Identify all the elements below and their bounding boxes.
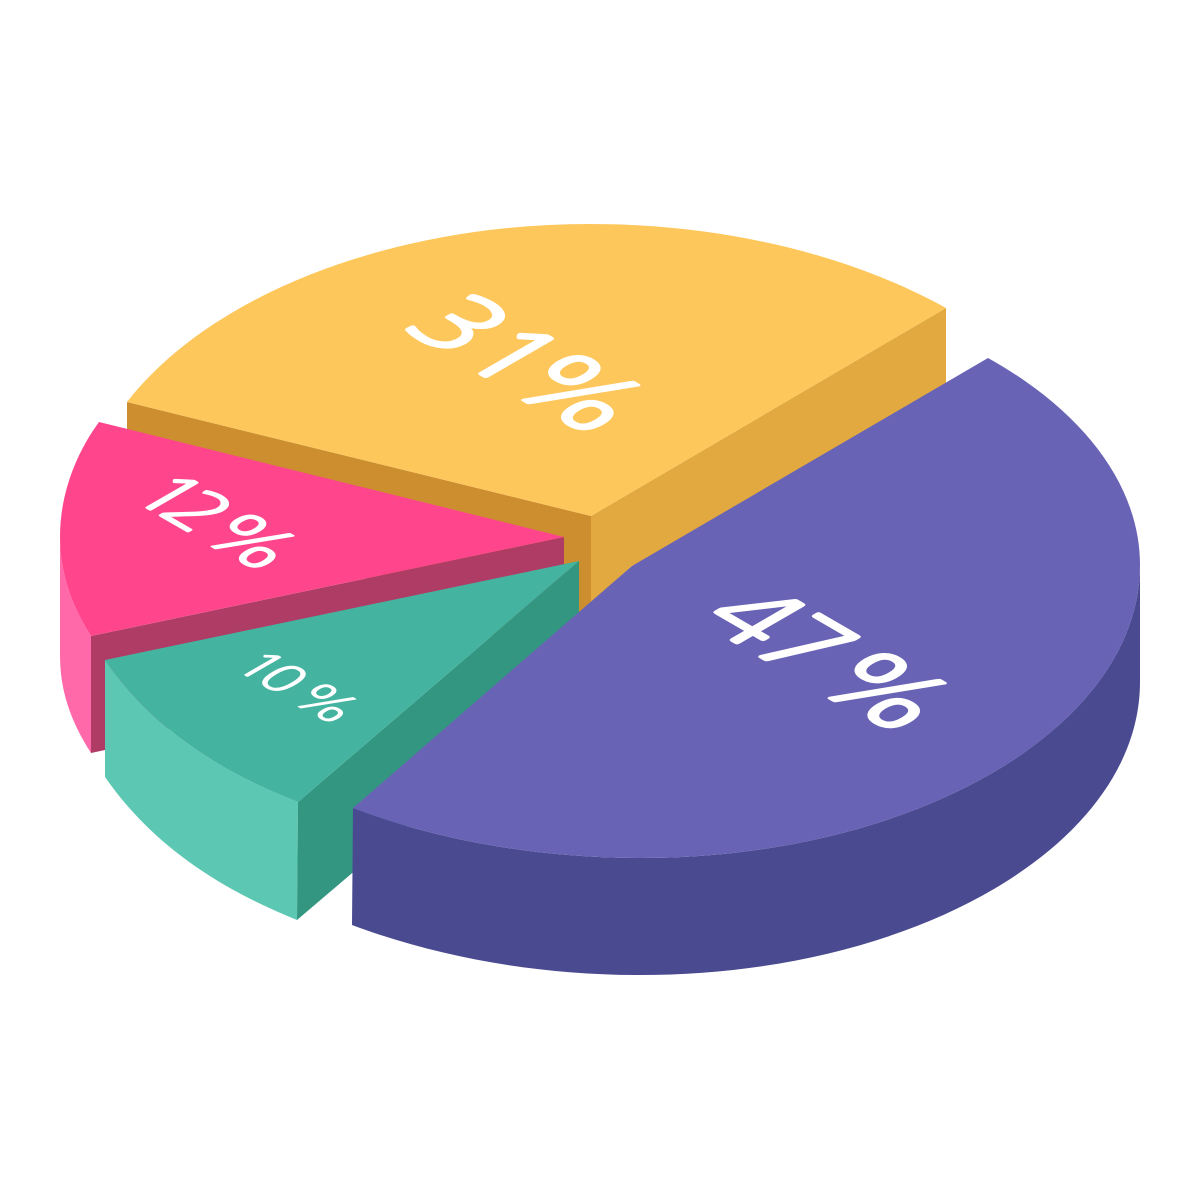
slice: 12 percent pink — [60, 422, 564, 753]
slice: 31 percent yellow — [127, 224, 946, 640]
green top face — [105, 561, 579, 802]
green inner wall — [297, 561, 579, 920]
slice: 10 percent green — [105, 561, 579, 920]
purple outer wall — [352, 565, 1140, 975]
label: 31 percent: 31% — [386, 282, 673, 448]
yellow right side wall — [578, 308, 946, 640]
purple top face — [353, 358, 1140, 858]
green outer wall — [105, 660, 298, 920]
pink top face — [60, 422, 564, 636]
yellow top face — [127, 224, 946, 516]
label: 12 percent: 12% — [117, 465, 318, 581]
label: 47 percent: 47% — [683, 575, 979, 746]
yellow left side wall — [127, 402, 591, 640]
pink outer wall — [60, 537, 91, 753]
label: 10 percent: 10% — [224, 645, 373, 731]
slice: 47 percent purple — [352, 358, 1140, 975]
pink inner wall — [91, 537, 564, 753]
